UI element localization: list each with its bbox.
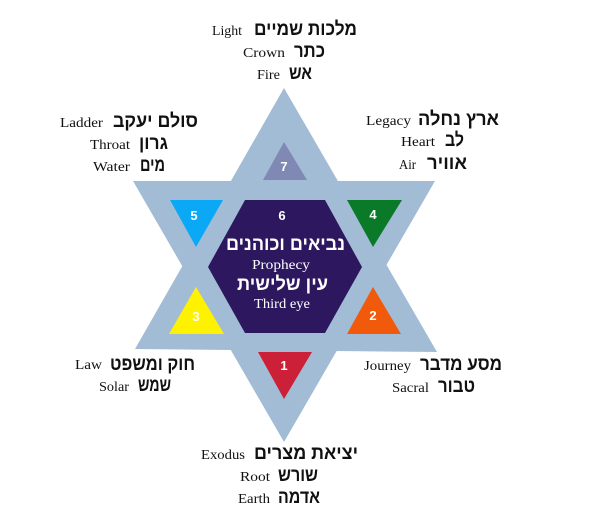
- triangle 3: solar: 3: [192, 309, 200, 324]
- label: sacral: [364, 354, 502, 397]
- label: solar: Law: [75, 358, 103, 373]
- label: root: יציאת מצרים: [254, 443, 358, 464]
- central hexagon: third eye: Third eye: [254, 297, 310, 312]
- label: heart: אוויר: [427, 153, 467, 174]
- label: sacral: מסע מדבר: [420, 354, 502, 375]
- triangle 3: solar: [169, 287, 224, 334]
- label: crown: אש: [289, 63, 312, 84]
- label: heart: ארץ נחלה: [418, 109, 499, 130]
- triangle 2: sacral: [347, 287, 401, 334]
- label: root: [201, 443, 358, 508]
- central hexagon: third eye: [208, 200, 362, 333]
- label: root: Root: [240, 470, 270, 485]
- label: crown: כתר: [294, 41, 325, 62]
- label: heart: [366, 109, 499, 174]
- central hexagon: third eye: Prophecy: [252, 258, 310, 273]
- triangle 1: root: [258, 352, 312, 399]
- label: crown: מלכות שמיים: [254, 19, 357, 40]
- label: throat: Throat: [90, 138, 130, 153]
- label: root: Earth: [238, 492, 270, 507]
- central hexagon: third eye: 6: [278, 208, 286, 223]
- label: crown: Crown: [243, 46, 285, 61]
- triangle 2: sacral: 2: [369, 308, 377, 323]
- label: throat: Water: [93, 160, 130, 175]
- label: root: שורש: [278, 465, 318, 486]
- label: solar: [75, 354, 195, 396]
- label: solar: שמש: [138, 375, 171, 396]
- label: crown: Light: [212, 24, 242, 39]
- triangle 1: root: 1: [280, 358, 288, 373]
- label: heart: לב: [445, 130, 464, 151]
- label: root: אדמה: [278, 487, 320, 508]
- triangle 5: throat: [170, 200, 223, 247]
- label: solar: Solar: [99, 380, 129, 395]
- triangle 5: throat: 5: [190, 208, 198, 223]
- label: sacral: Sacral: [392, 381, 429, 396]
- triangle 4: heart: [347, 200, 402, 247]
- label: crown: [212, 19, 357, 84]
- label: throat: מים: [140, 155, 165, 176]
- label: solar: חוק ומשפט: [110, 354, 195, 375]
- label: throat: [60, 111, 198, 176]
- label: root: Exodus: [201, 448, 245, 463]
- label: throat: Ladder: [60, 116, 103, 131]
- label: throat: גרון: [139, 133, 168, 154]
- label: heart: Air: [399, 158, 416, 173]
- triangle 4: heart: 4: [369, 207, 377, 222]
- central hexagon: third eye: עין שלישית: [237, 274, 328, 295]
- label: sacral: טבור: [438, 376, 475, 397]
- triangle 7: crown: [263, 142, 307, 180]
- triangle 7: crown: 7: [280, 159, 288, 174]
- label: heart: Heart: [401, 135, 435, 150]
- label: crown: Fire: [257, 68, 280, 83]
- label: sacral: Journey: [364, 359, 411, 374]
- central hexagon: third eye: נביאים וכוהנים: [226, 234, 345, 255]
- hexagram star: [133, 88, 437, 442]
- label: throat: סולם יעקב: [113, 111, 198, 132]
- label: heart: Legacy: [366, 114, 411, 129]
